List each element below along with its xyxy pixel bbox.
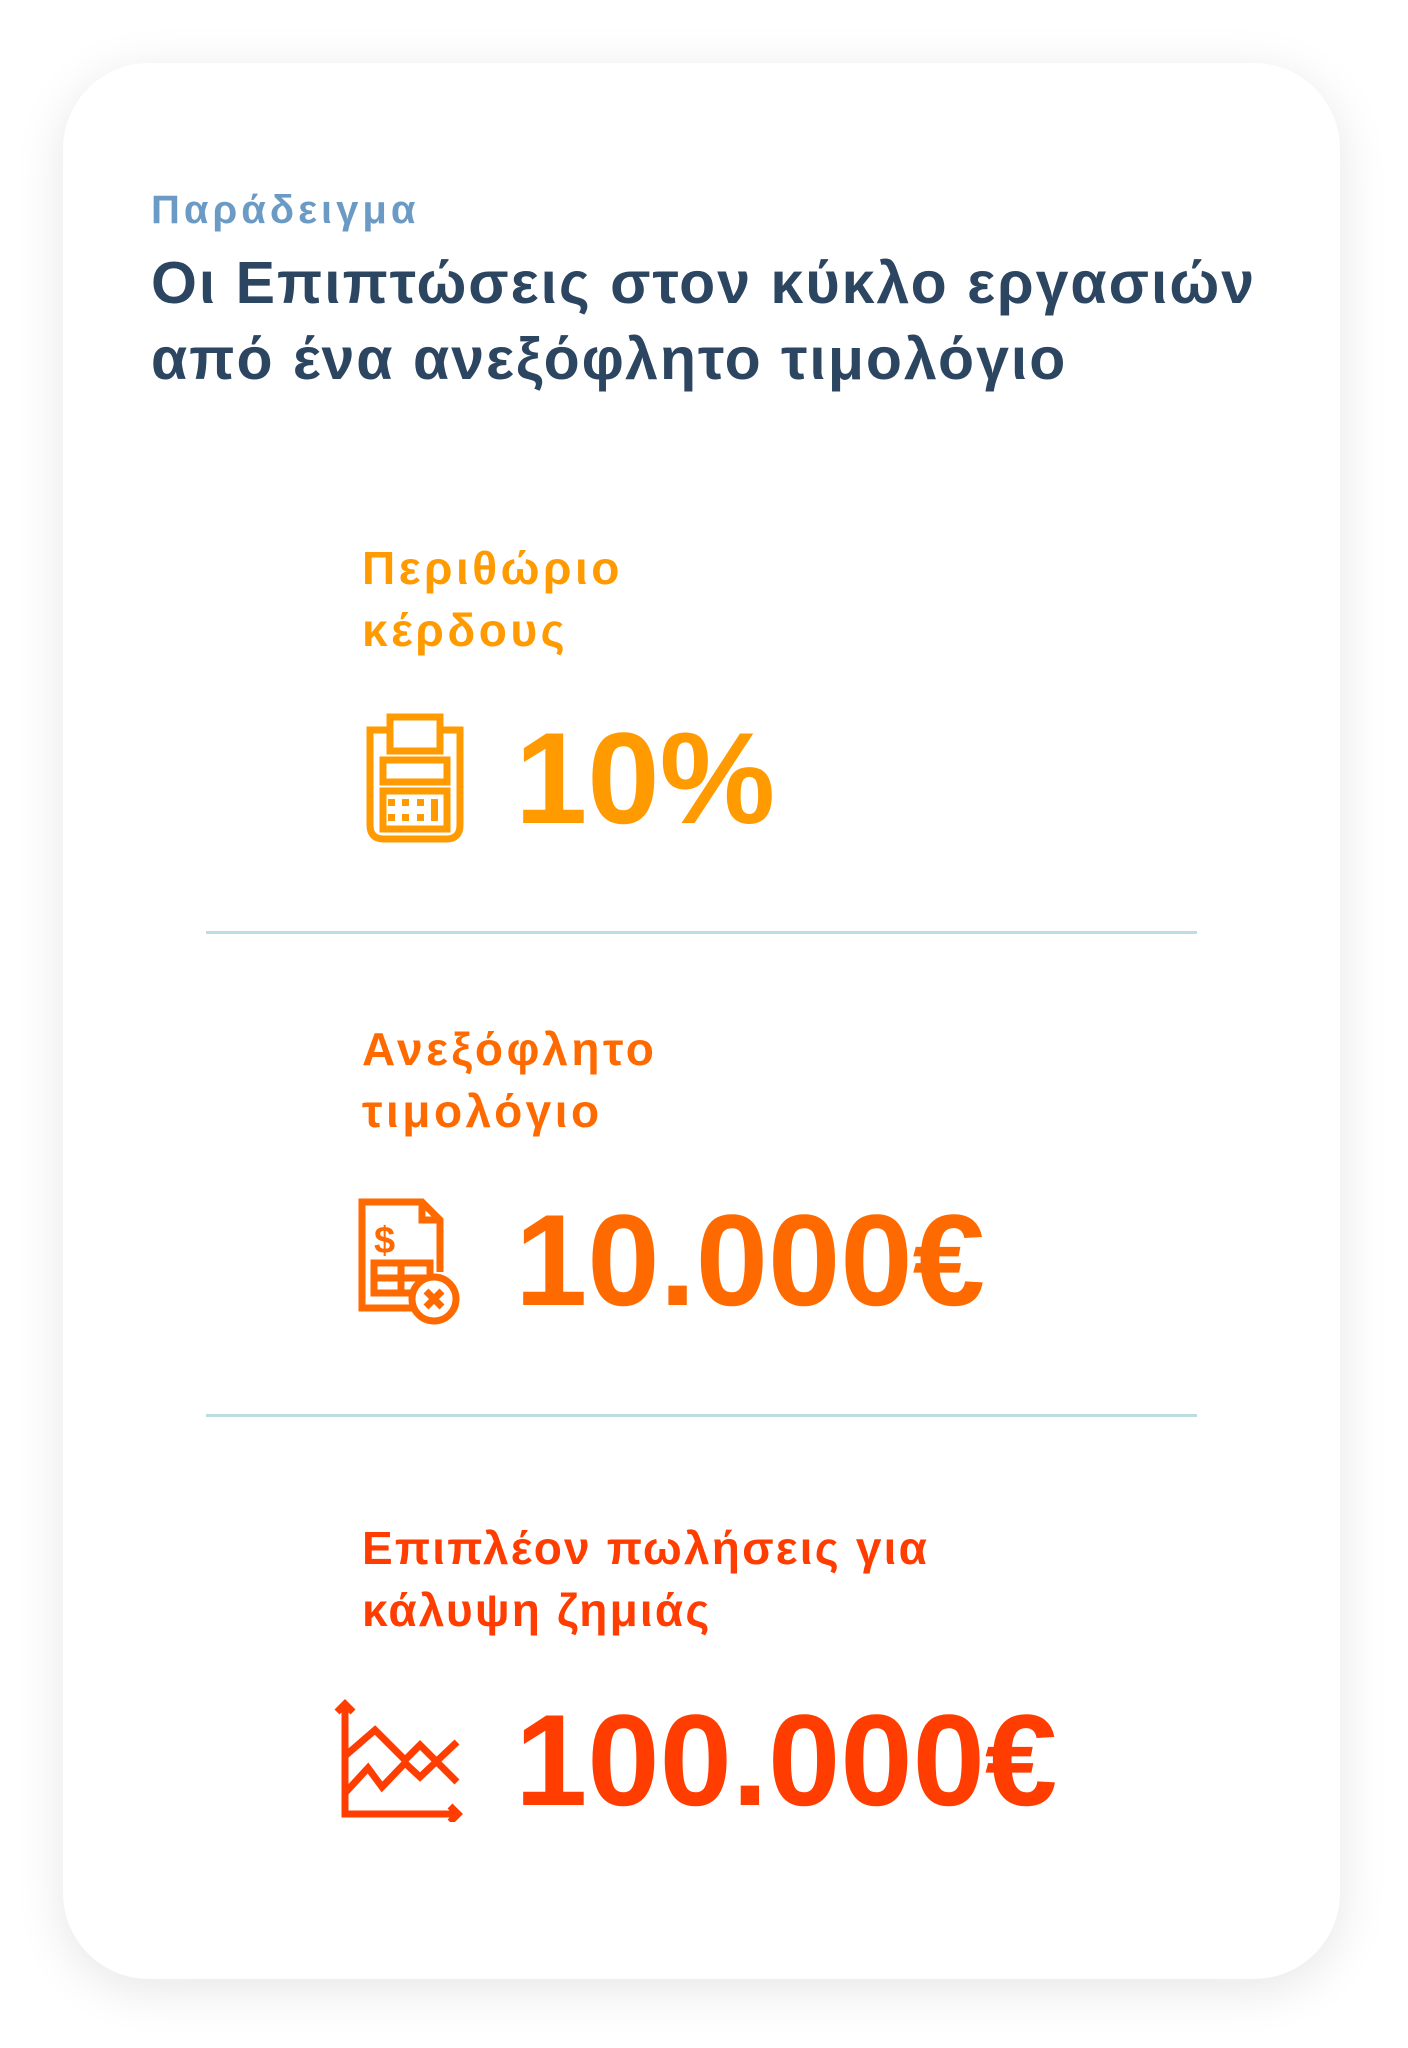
value: 10%: 10%	[515, 705, 775, 851]
divider	[206, 931, 1197, 934]
label: extra sales: κάλυψη ζημιάς	[362, 1584, 712, 1636]
divider	[206, 1414, 1197, 1417]
value: 100.000€: 100.000€	[515, 1687, 1057, 1833]
heading: από ένα ανεξόφλητο τιμολόγιο	[151, 326, 1067, 392]
icon: invoice with x: $	[374, 1220, 395, 1262]
icon: invoice with x	[358, 1198, 460, 1324]
label: unpaid invoice: Ανεξόφλητο	[362, 1023, 657, 1075]
label: unpaid invoice	[362, 1023, 657, 1137]
label: profit margin	[362, 542, 623, 656]
label: unpaid invoice: τιμολόγιο	[362, 1085, 603, 1137]
label: extra sales: Επιπλέον πωλήσεις για	[362, 1522, 929, 1574]
label: extra sales	[362, 1522, 929, 1636]
label: profit margin: Περιθώριο	[362, 542, 623, 594]
value: 10.000€: 10.000€	[515, 1187, 985, 1333]
icon: chart	[334, 1699, 463, 1822]
heading: Οι Επιπτώσεις στον κύκλο εργασιών	[151, 250, 1256, 316]
subtitle: Παράδειγμα	[151, 188, 419, 232]
label: profit margin: κέρδους	[362, 604, 568, 656]
icon: calculator	[366, 714, 464, 842]
heading	[151, 250, 1256, 392]
